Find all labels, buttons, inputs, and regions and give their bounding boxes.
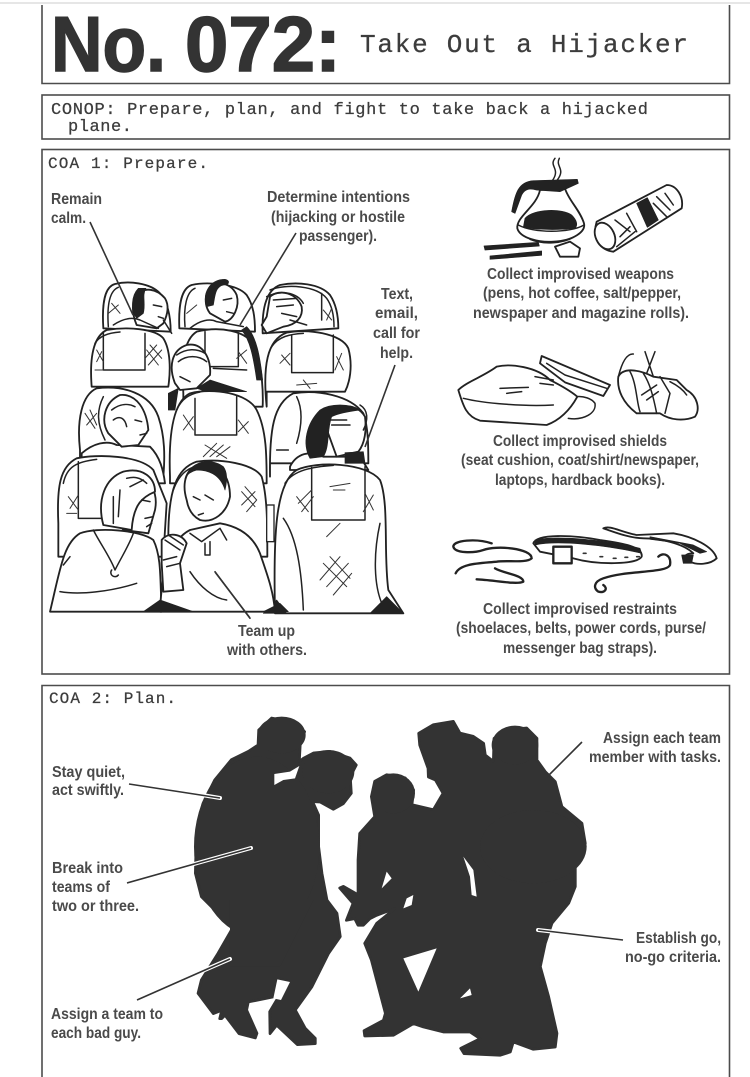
callout: text, email, call for help: help. [380, 345, 413, 362]
second row seats [91, 328, 170, 387]
back row passengers [133, 290, 168, 328]
callout: assign tasks: member with tasks. [589, 749, 721, 766]
callout: determine intentions: Determine intentions [267, 189, 410, 206]
left group silhouette [195, 718, 356, 1045]
front row seats [58, 456, 167, 557]
callout: stay quiet [52, 764, 220, 799]
callout: assign a team: each bad guy. [51, 1025, 141, 1042]
back row seats [103, 283, 171, 332]
restraints caption: (shoelaces, belts, power cords, purse/ [456, 620, 707, 637]
man, front row [160, 523, 275, 612]
title number: 072: [185, 0, 341, 88]
callout: break into teams: Break into [52, 860, 123, 877]
panel: COA 2 plan [42, 686, 730, 1077]
callout: remain calm: Remain [51, 191, 102, 208]
callout: remain calm: calm. [51, 210, 86, 227]
callout: stay quiet: Stay quiet, [52, 764, 125, 781]
CONOP panel [42, 95, 730, 139]
title text: Take Out a Hijacker [360, 30, 688, 60]
illustration: passengers in airplane seats [50, 279, 403, 618]
left passenger, third row [82, 443, 165, 483]
shields caption: (seat cushion, coat/shirt/newspaper, [461, 452, 699, 469]
callout: team up with others: Team up [238, 623, 295, 640]
weapons caption [473, 266, 689, 322]
CONOP panel: CONOP: Prepare, plan, and fight to take back a hijacked [51, 101, 648, 120]
callout: go no-go criteria: Establish go, [636, 930, 721, 947]
title panel [42, 0, 730, 88]
callout: assign a team [51, 959, 230, 1042]
shields caption: Collect improvised shields [493, 433, 667, 450]
shields caption [461, 433, 699, 489]
restraints caption: Collect improvised restraints [483, 601, 677, 618]
panel: COA 1 prepare [42, 150, 730, 674]
right passenger with phone [290, 453, 368, 470]
callout: stay quiet: act swiftly. [52, 782, 124, 799]
callout: go no-go criteria [538, 930, 721, 966]
callout: team up with others: with others. [226, 642, 307, 659]
callout: assign a team: Assign a team to [51, 1006, 163, 1023]
callout: break into teams [52, 848, 251, 915]
callout: go no-go criteria: no-go criteria. [625, 949, 721, 966]
callout: text, email, call for help: email, [375, 305, 418, 322]
icon: shoelaces, belt, power cord and bag strap [453, 527, 717, 592]
icon: coffee pot, pens, salt packet and newspaper roll [484, 158, 682, 259]
weapons caption: (pens, hot coffee, salt/pepper, [483, 285, 681, 302]
clasped hands [162, 535, 187, 592]
restraints caption [456, 601, 707, 657]
callout: team up with others [215, 572, 307, 659]
title number: No. [51, 0, 166, 88]
callout: text, email, call for help: Text, [381, 286, 413, 303]
woman, front row [50, 530, 162, 612]
third row seats [79, 388, 164, 477]
weapons caption: Collect improvised weapons [487, 266, 674, 283]
callout: text, email, call for help: call for [373, 325, 420, 342]
title number [51, 0, 341, 88]
icon: seat cushion, book and wrapped fist [458, 352, 698, 425]
silhouette: team of passengers [194, 717, 587, 1055]
callout: determine intentions [240, 189, 410, 325]
callout: text, email, call for help [365, 286, 420, 447]
shields caption: laptops, hardback books). [495, 472, 665, 489]
restraints caption: messenger bag straps). [503, 640, 657, 657]
callout: determine intentions: (hijacking or hostile [271, 209, 405, 226]
callout: remain calm [51, 191, 133, 315]
leaning passenger [172, 345, 210, 390]
COA 2 heading: COA 2: Plan. [49, 690, 176, 708]
right group silhouette [340, 721, 585, 1055]
callout: determine intentions: passenger). [299, 228, 377, 245]
callout: assign tasks [547, 730, 721, 777]
callout: break into teams: two or three. [52, 898, 139, 915]
CONOP panel: plane. [68, 118, 132, 137]
COA 1 heading: COA 1: Prepare. [48, 155, 208, 173]
callout: assign tasks: Assign each team [603, 730, 721, 747]
callout: break into teams: teams of [52, 879, 111, 896]
weapons caption: newspaper and magazine rolls). [473, 305, 689, 322]
